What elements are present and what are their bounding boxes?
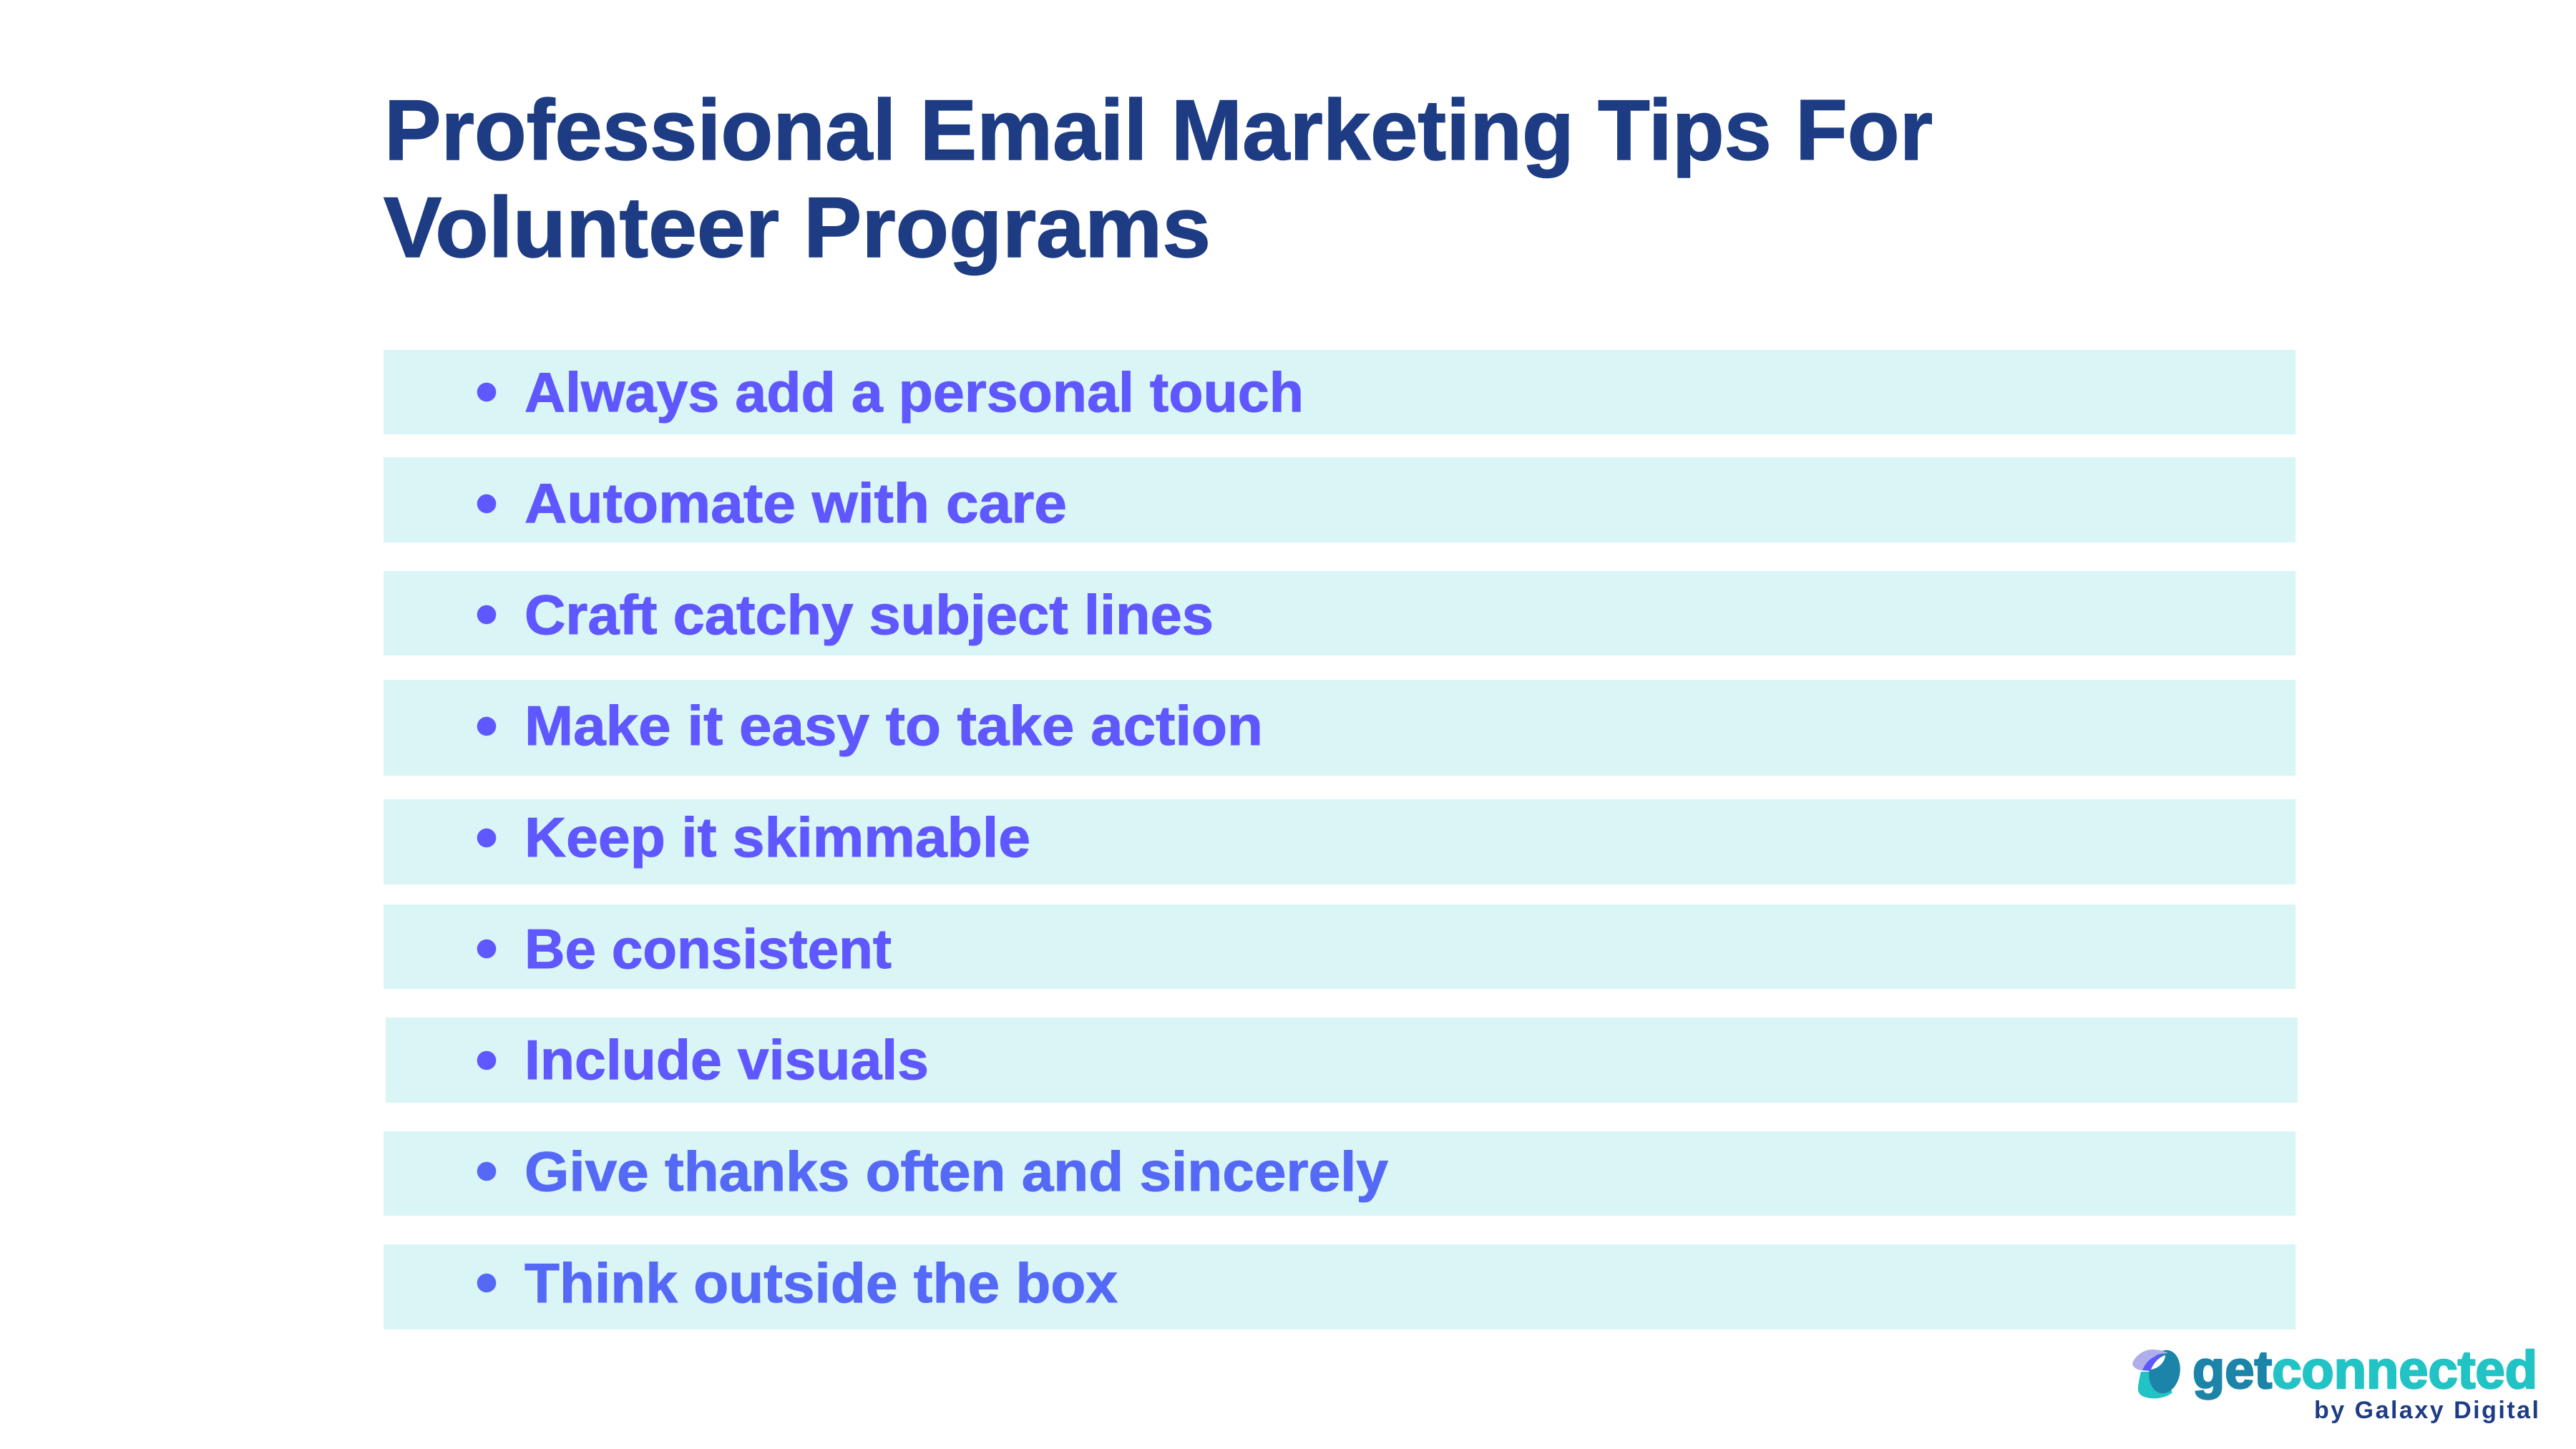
list item: easy action: [384, 680, 2296, 776]
icon: logo mark: [2132, 1347, 2183, 1398]
title: [384, 82, 1933, 275]
list item: automate: Automate with care: [525, 472, 1067, 535]
list item: outside the box: [384, 1244, 2296, 1330]
list item: personal touch: [384, 350, 2296, 434]
list item: skimmable: [384, 799, 2296, 884]
list item: outside the box: Think outside the box: [525, 1252, 1118, 1314]
list item: thanks: Give thanks often and sincerely: [525, 1140, 1388, 1203]
logo tagline: by Galaxy Digital: [2314, 1397, 2539, 1424]
list item: subject lines: [384, 571, 2296, 655]
title: Professional Email Marketing Tips For: [384, 82, 1933, 178]
list item: consistent: [384, 904, 2296, 989]
title: Volunteer Programs: [384, 180, 1211, 275]
list item: personal touch: Always add a personal touch: [525, 361, 1304, 424]
list item: thanks: [384, 1131, 2296, 1216]
list item: consistent: Be consistent: [525, 917, 892, 980]
logo wordmark: getconnected: [2192, 1340, 2537, 1400]
list item: subject lines: Craft catchy subject lines: [525, 583, 1214, 646]
list item: skimmable: Keep it skimmable: [525, 806, 1030, 869]
logo: getconnected by Galaxy Digital: [2132, 1340, 2539, 1424]
list item: visuals: [386, 1018, 2298, 1103]
list item: visuals: Include visuals: [525, 1028, 929, 1091]
list item: easy action: Make it easy to take action: [525, 694, 1263, 757]
list item: automate: [384, 457, 2296, 542]
